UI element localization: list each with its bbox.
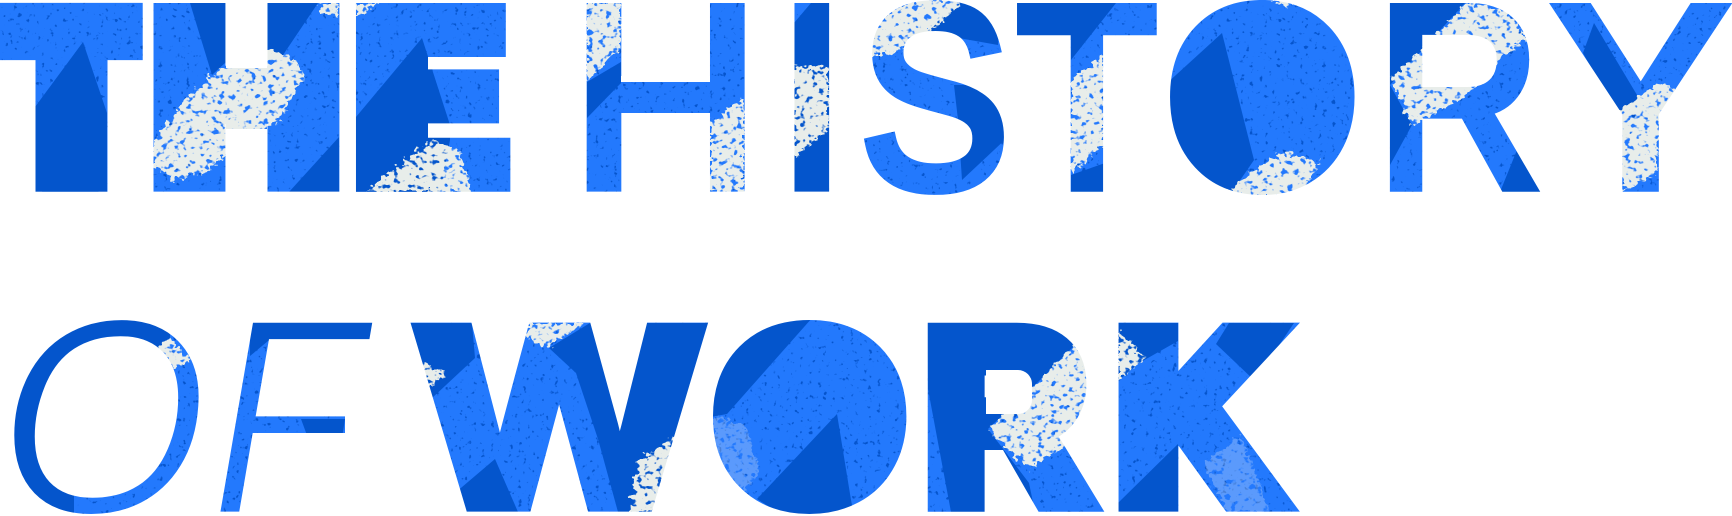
dark blue brush strokes	[0, 316, 1294, 516]
base paint: bright blue	[0, 0, 1732, 197]
heading line 1: THE HISTORY	[0, 0, 1732, 197]
pale washed patches	[714, 415, 1270, 512]
heading line 2: OF WORK	[14, 320, 1300, 514]
white brush strokes	[158, 323, 1145, 512]
white brush strokes	[154, 0, 1676, 197]
paint speckle texture	[78, 320, 1295, 514]
dark blue brush strokes	[35, 0, 1640, 192]
base paint: bright blue	[74, 320, 1300, 514]
paint speckle texture	[0, 0, 1732, 197]
